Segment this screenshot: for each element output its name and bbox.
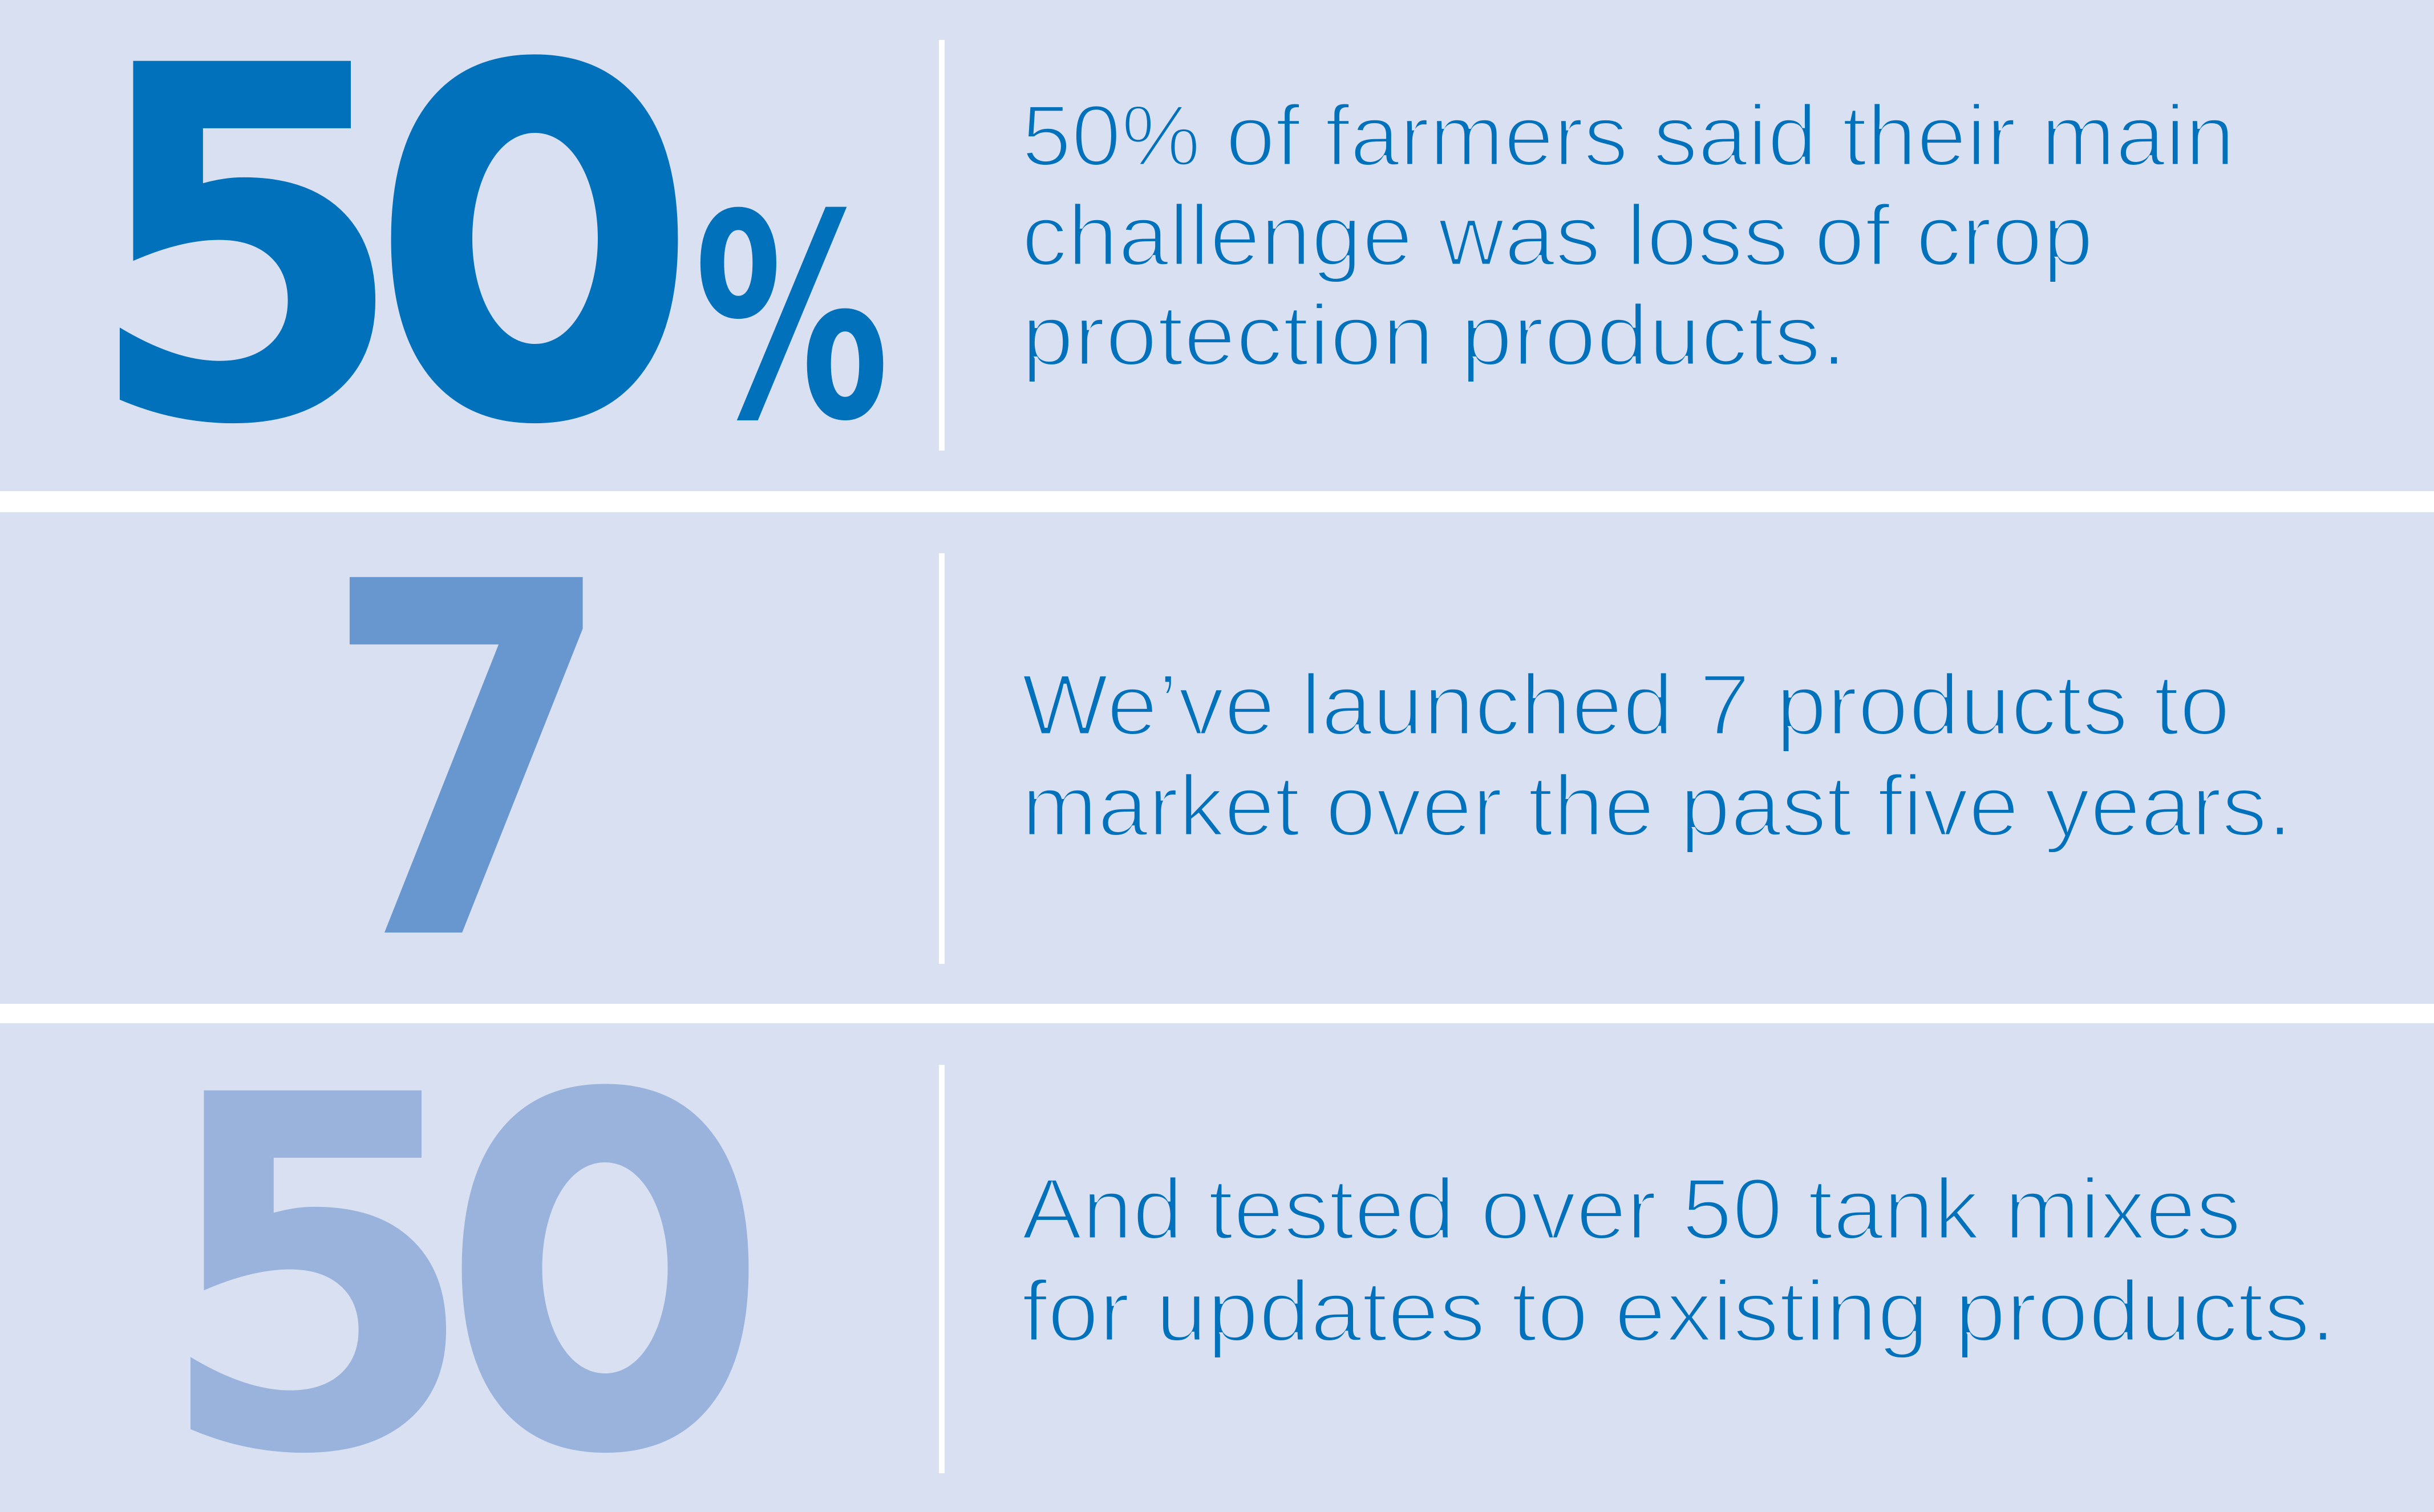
big number: 50 — [155, 993, 772, 1512]
text: farmers statement: 50% of farmers said their main — [1022, 87, 2235, 184]
panel: 50 percent of farmers — [0, 0, 2434, 532]
big number: 50%: % — [694, 155, 889, 484]
text: tank mixes statement — [1022, 1161, 2336, 1360]
text: tank mixes statement: And tested over 50 tank mixes — [1022, 1161, 2241, 1258]
text: products launched statement — [1022, 656, 2293, 854]
big number: 50% — [84, 0, 889, 532]
text: farmers statement — [1022, 87, 2235, 384]
text: farmers statement: challenge was loss of crop — [1022, 187, 2093, 284]
text: products launched statement: We’ve launched 7 products to — [1022, 656, 2230, 753]
big number: 7: 7 — [321, 480, 617, 1048]
panel: 7 products — [0, 480, 2434, 1048]
panel: 50 tank mixes — [0, 993, 2434, 1512]
text: farmers statement: protection products. — [1022, 287, 1847, 384]
text: products launched statement: market over the past five years. — [1022, 757, 2293, 854]
text: tank mixes statement: for updates to existing products. — [1022, 1263, 2336, 1360]
